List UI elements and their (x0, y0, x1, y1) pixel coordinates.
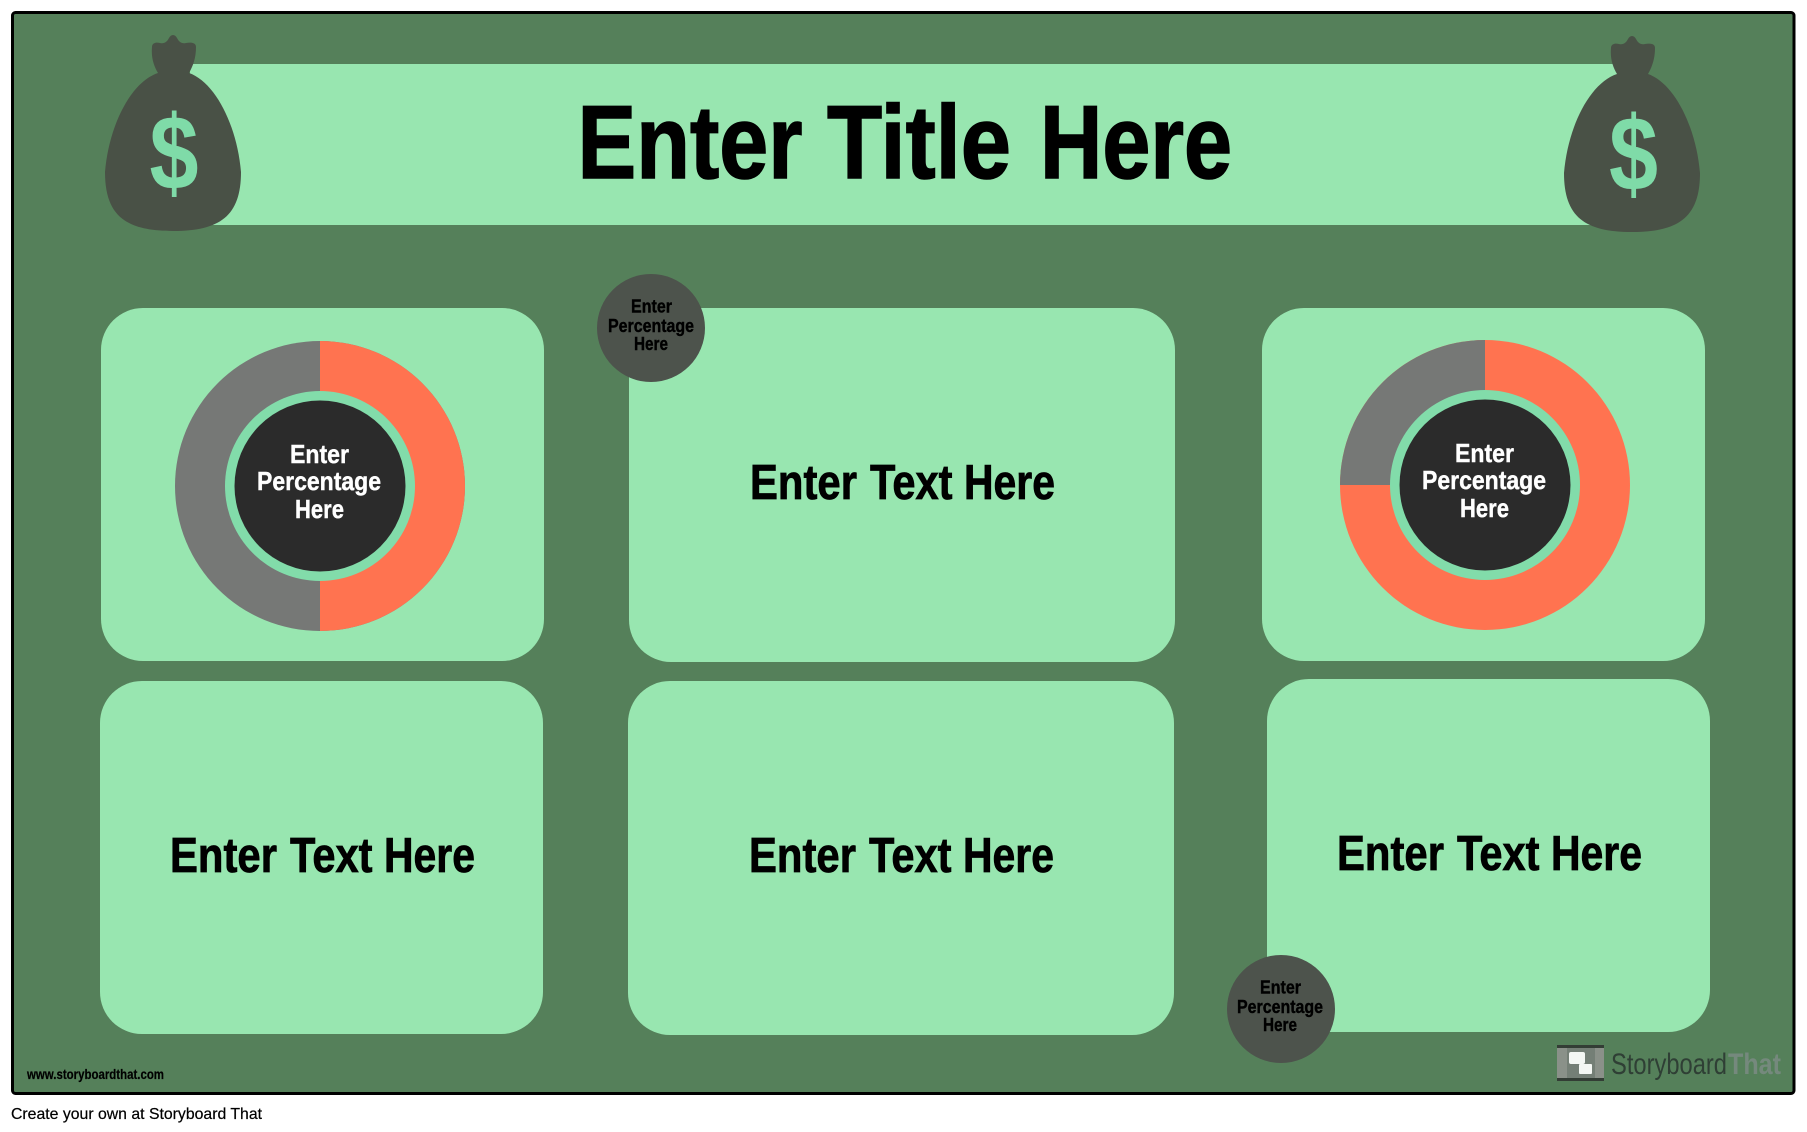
panel: bottom right text (1267, 679, 1710, 1032)
donut label (257, 439, 381, 524)
panel: bottom left text: Text (290, 828, 372, 883)
panel: top centre text (629, 308, 1175, 662)
panel: bottom centre text (628, 681, 1174, 1035)
title: Enter (578, 85, 802, 201)
panel: bottom right text: Here (1551, 826, 1642, 881)
title banner (190, 64, 1620, 225)
donut label: Here (295, 494, 344, 524)
badge: top centre percentage (597, 274, 705, 382)
icon: money bag left: $ (150, 94, 198, 212)
title: Here (1040, 85, 1232, 201)
donut chart 50 percent (175, 341, 465, 631)
panel: bottom centre text: Enter (749, 828, 856, 883)
icon: money bag right (1564, 36, 1700, 232)
panel: bottom left text (100, 681, 543, 1034)
logo: Storyboard That (1557, 1045, 1781, 1081)
panel: top left donut (101, 308, 544, 661)
badge: bottom right percentage: Here (1263, 1014, 1297, 1035)
caption: Create your own at Storyboard That (11, 1106, 263, 1123)
panel: top right donut (1262, 308, 1705, 661)
badge: bottom right percentage (1227, 955, 1335, 1063)
icon: money bag left (105, 35, 241, 231)
donut label: Here (1460, 493, 1509, 523)
panel: top centre text: Text (870, 455, 952, 510)
donut label: Percentage (1422, 465, 1546, 495)
donut label: Enter (290, 439, 349, 469)
panel: bottom right text: Enter (1337, 826, 1444, 881)
logo: Storyboard That: That (1728, 1048, 1781, 1081)
logo: Storyboard That: Storyboard (1611, 1048, 1727, 1081)
badge: top centre percentage: Here (634, 333, 668, 354)
badge: top centre percentage: Percentage (608, 315, 694, 336)
panel: bottom left text: Enter (170, 828, 277, 883)
panel: bottom left text: Here (384, 828, 475, 883)
badge: bottom right percentage: Percentage (1237, 996, 1323, 1017)
icon: money bag right: $ (1609, 95, 1658, 213)
panel: bottom centre text: Here (963, 828, 1054, 883)
title: Title (827, 85, 1011, 201)
donut chart 75 percent (1340, 340, 1630, 630)
panel: bottom centre text: Text (869, 828, 952, 883)
badge: bottom right percentage: Enter (1260, 976, 1301, 998)
website url: www.storyboardthat.com (26, 1067, 164, 1082)
donut label (1422, 438, 1546, 523)
panel: bottom right text: Text (1457, 826, 1540, 881)
panel: top centre text: Enter (750, 455, 857, 510)
donut label: Percentage (257, 466, 381, 496)
badge: top centre percentage: Enter (631, 296, 672, 316)
donut label: Enter (1455, 438, 1514, 468)
panel: top centre text: Here (964, 455, 1055, 510)
